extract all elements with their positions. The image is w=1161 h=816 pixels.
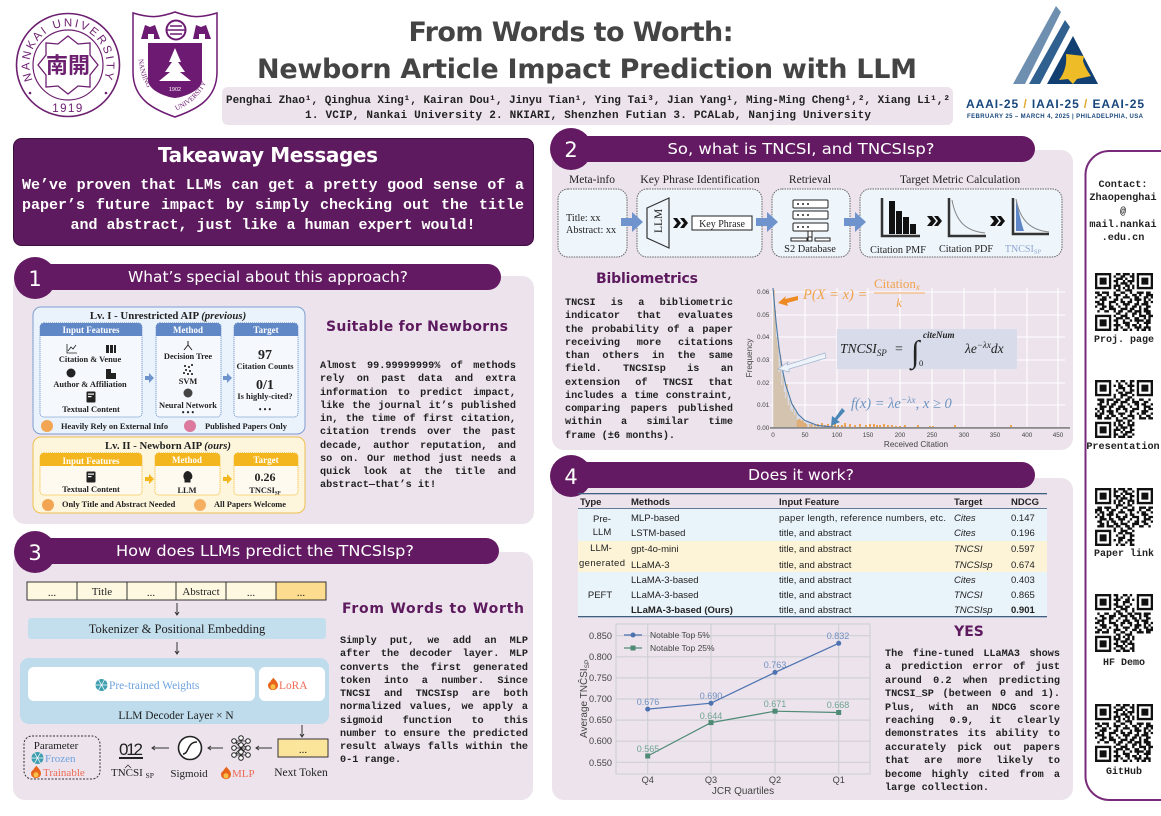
text: suitable for newborns body xyxy=(320,360,516,494)
chart: average TNCSI by JCR quartile: Notable Top 5% xyxy=(650,630,710,640)
diagram: Lv. I unrestricted AIP: Method xyxy=(173,325,203,335)
diagram: Lv. I unrestricted AIP: 97 xyxy=(258,348,272,363)
diagram: Lv. I unrestricted AIP: Decision Tree xyxy=(164,352,212,361)
text: takeaway body: and abstract, just like a human expert would! xyxy=(70,217,476,234)
block: predicted TNCSI output xyxy=(111,740,154,780)
authors and affiliations: Penghai Zhao¹, Qinghua Xing¹, Kairan Dou¹, Jinyu Tian¹, Ying Tai³, Jian Yang¹, Ming-Ming Cheng¹,², Xiang Li¹,² xyxy=(226,95,950,107)
logo: Nankai University: 1919 xyxy=(52,103,84,115)
chart: citation frequency distribution: 300 xyxy=(959,432,970,439)
chart: citation frequency distribution: 100 xyxy=(832,432,843,439)
chart: citation frequency distribution: k xyxy=(896,295,902,310)
chart: citation frequency distribution xyxy=(745,276,1070,449)
chart: citation frequency distribution: 150 xyxy=(863,432,874,439)
table: NDCG results: 0.901 xyxy=(1011,605,1035,616)
table: NDCG results: 0.597 xyxy=(1011,544,1035,555)
table: NDCG results: gpt-4o-mini xyxy=(631,544,679,555)
panel 3: how LLMs predict xyxy=(13,531,533,800)
text: suitable for newborns body: abstract—that’s it! xyxy=(320,480,436,491)
header bar 1: 1 xyxy=(28,267,42,291)
diagram: Lv. I unrestricted AIP: Target xyxy=(253,325,279,335)
table: NDCG results: title, and abstract xyxy=(779,544,852,555)
diagram: TNCSI pipeline: Abstract: xx xyxy=(566,225,616,236)
diagram: TNCSI pipeline: Citation PMF xyxy=(870,245,926,256)
title: From Words to Worth: xyxy=(408,17,734,48)
chart: average TNCSI by JCR quartile: Q3 xyxy=(705,775,717,785)
table: NDCG results: Methods xyxy=(631,497,670,508)
table: NDCG results: generated xyxy=(579,558,625,569)
chart: citation frequency distribution: 250 xyxy=(927,432,938,439)
text: results body: The fine-tuned LLaMA3 shows xyxy=(885,649,1060,660)
block: LLM decoder layer: LoRA xyxy=(279,680,308,692)
table: NDCG results: 0.147 xyxy=(1011,513,1035,524)
text: from words to worth body: Simply put, we add an MLP xyxy=(340,636,528,647)
block: sigmoid: Sigmoid xyxy=(170,768,208,780)
diagram: TNCSI pipeline: S2 Database xyxy=(784,244,836,255)
table: NDCG results: LLaMA-3-based (Ours) xyxy=(631,605,733,616)
table: NDCG results: TNCSIsp xyxy=(954,560,993,571)
logo: Nankai University: NANKAI UNIVERSITY xyxy=(22,18,114,82)
block: tokenizer: Tokenizer & Positional Embedding xyxy=(89,622,266,636)
diagram: Lv. II newborn AIP: 0.26 xyxy=(254,470,276,484)
block: MLP: MLP xyxy=(232,768,255,780)
chart: average TNCSI by JCR quartile: 0.650 xyxy=(589,715,612,725)
header bar 4: Does it work? xyxy=(748,466,854,484)
chart: average TNCSI by JCR quartile: Q4 xyxy=(642,775,654,785)
QR code: HF demo: HF Demo xyxy=(1103,658,1145,669)
text: results body: that are more likely to xyxy=(885,756,1060,767)
chart: citation frequency distribution: 50 xyxy=(801,432,809,439)
diagram: Lv. II newborn AIP: Target xyxy=(253,455,279,465)
diagram: TNCSI pipeline: SP xyxy=(1034,248,1041,256)
chart: citation frequency distribution: 350 xyxy=(990,432,1001,439)
diagram: Lv. II newborn AIP: Only Title and Abstract Needed xyxy=(62,500,176,509)
text: bibliometrics body: receiving more citations xyxy=(565,338,733,349)
arrow: tokenizer to decoder xyxy=(175,642,179,654)
table: NDCG results: 0.865 xyxy=(1011,590,1035,601)
header bar 3: 3 xyxy=(28,541,42,565)
chart: citation frequency distribution: 0 xyxy=(919,358,923,368)
arrow: decoder to next token xyxy=(300,725,304,737)
chart: citation frequency distribution: 0 xyxy=(771,432,775,439)
text: results body: around 0.2 when predicting xyxy=(885,676,1060,687)
legend: parameter: Parameter xyxy=(34,740,79,752)
diagram: Lv. II newborn AIP: TNCSI xyxy=(249,486,275,495)
QR code: paper link xyxy=(1094,488,1154,560)
arrow: next token to MLP xyxy=(256,746,272,750)
chart: average TNCSI by JCR quartile: 0.832 xyxy=(827,631,849,641)
text: suitable for newborns body: so on. Our method just needs a xyxy=(320,454,516,465)
chart: citation frequency distribution: x xyxy=(915,282,920,292)
block: next token xyxy=(274,739,328,779)
diagram: Lv. I unrestricted AIP: SVM xyxy=(179,377,197,386)
text: from words to worth body: token into a number. Since xyxy=(340,676,528,687)
chart: average TNCSI by JCR quartile: 0.644 xyxy=(700,711,722,721)
text: bibliometrics body: indicator that evaluates xyxy=(565,311,733,322)
diagram: Lv. II newborn AIP: Textual Content xyxy=(62,485,120,494)
header bar 3 xyxy=(14,531,499,573)
logo: AAAI-25 conference: FEBRUARY 25 – MARCH 4, 2025 | PHILADELPHIA, USA xyxy=(967,114,1144,120)
legend: parameter: Trainable xyxy=(43,767,85,779)
table: NDCG results: LLM xyxy=(593,527,611,538)
chart: citation frequency distribution: , x ≥ 0 xyxy=(916,396,953,412)
table: NDCG results: Input Feature xyxy=(779,497,839,508)
chart: citation frequency distribution: −λx xyxy=(977,340,991,350)
text: contact: Zhaopenghai xyxy=(1089,192,1157,204)
chart: citation frequency distribution: 0.05 xyxy=(757,312,770,319)
diagram: Lv. II newborn AIP: Input Features xyxy=(62,456,120,466)
logo: Nankai University: 南開 xyxy=(46,48,90,80)
diagram: Lv. II newborn AIP: LLM xyxy=(177,486,197,495)
table: NDCG results: TNCSI xyxy=(954,590,983,601)
table: NDCG results: LLaMA-3-based xyxy=(631,575,699,586)
table: NDCG results: title, and abstract xyxy=(779,575,852,586)
chart: citation frequency distribution: f(x) = λe xyxy=(851,396,901,412)
text: results body: become highly cited from a xyxy=(885,770,1060,781)
authors and affiliations: 1. VCIP, Nankai University 2. NKIARI, Shenzhen Futian 3. PCALab, Nanjing University xyxy=(305,110,871,122)
text: bibliometrics body xyxy=(565,297,733,445)
chart: citation frequency distribution: 0.04 xyxy=(757,334,770,341)
text: bibliometrics body: the probability of a paper xyxy=(565,324,733,336)
chart: average TNCSI by JCR quartile: Q1 xyxy=(833,775,845,785)
panel: contact and links sidebar xyxy=(1086,151,1161,800)
text: from words to worth body: sigmoid function to this xyxy=(340,716,528,726)
text: contact xyxy=(1089,180,1157,244)
text: from words to worth body: number to ensure the predicted xyxy=(340,729,528,740)
text: contact: .edu.cn xyxy=(1102,232,1144,244)
diagram: Lv. I unrestricted AIP: • • • xyxy=(259,405,271,414)
chart: average TNCSI by JCR quartile: 0.800 xyxy=(589,652,612,662)
chart: citation frequency distribution: Citation xyxy=(874,276,916,291)
QR code: presentation xyxy=(1086,380,1160,453)
diagram: input token row: Abstract xyxy=(182,586,220,598)
text: bibliometrics body: includes a time constraint, xyxy=(565,391,733,402)
text: from words to worth body xyxy=(340,635,528,769)
table: NDCG results: MLP-based xyxy=(631,513,680,524)
diagram: Lv. I unrestricted AIP: 0/1 xyxy=(256,378,274,393)
chart: citation frequency distribution: −λx xyxy=(901,396,916,406)
diagram: TNCSI pipeline xyxy=(558,173,1062,257)
chart: citation frequency distribution: Received Citation xyxy=(884,440,949,449)
header bar 4: 4 xyxy=(564,465,578,489)
chart: citation frequency distribution: λe xyxy=(965,341,977,356)
block: LLM decoder layer: Pre-trained Weights xyxy=(109,680,200,692)
diagram: Lv. I unrestricted AIP: Author & Affiliation xyxy=(53,380,127,389)
chart: citation frequency distribution: 0.01 xyxy=(757,402,770,409)
text: contact: mail.nankai xyxy=(1089,219,1157,231)
arrow: sigmoid to output xyxy=(152,746,169,750)
text: results body: Plus, with an NDCG score xyxy=(885,703,1060,714)
table: NDCG results: PEFT xyxy=(588,590,612,601)
text: suitable for newborns body: like the journal it’s published xyxy=(320,401,516,412)
diagram: TNCSI pipeline: LLM xyxy=(653,209,665,233)
chart: citation frequency distribution: 0.06 xyxy=(757,289,770,296)
table: NDCG results: Target xyxy=(954,497,983,508)
diagram: Lv. I unrestricted AIP: Neural Network xyxy=(159,401,217,410)
diagram: Lv. I unrestricted AIP: Citation Counts xyxy=(236,362,294,371)
block: next token: ... xyxy=(299,744,307,756)
text: results body: large collection. xyxy=(885,783,989,794)
chart: citation frequency distribution: 450 xyxy=(1053,432,1064,439)
QR code: GitHub: GitHub xyxy=(1106,766,1142,778)
diagram: Lv. II newborn AIP xyxy=(33,437,305,513)
text: bibliometrics body: frame (±6 months). xyxy=(565,430,675,442)
text: from words to worth body: normalized values, we apply a xyxy=(340,702,528,713)
chart: average TNCSI by JCR quartile: 0.668 xyxy=(827,700,849,710)
heading: takeaway messages: Takeaway Messages xyxy=(158,143,378,167)
text: suitable for newborns body: decade, author reputation, and xyxy=(320,440,516,452)
QR code: project page xyxy=(1094,273,1154,346)
block: MLP xyxy=(221,736,255,780)
block: LLM decoder layer: LLM Decoder Layer × N xyxy=(118,710,234,722)
text: takeaway body xyxy=(22,176,524,238)
text: suitable for newborns body: in, the time of first citation, xyxy=(320,414,516,425)
text: bibliometrics body: TNCSI is a bibliometric xyxy=(565,298,733,309)
text: takeaway body: paper’s future impact by simply checking out the title xyxy=(22,197,524,214)
chart: average TNCSI by JCR quartile: Q2 xyxy=(769,775,781,785)
chart: citation frequency distribution: ∫ xyxy=(909,334,922,371)
chart: citation frequency distribution: 0.00 xyxy=(757,425,770,432)
table: NDCG results: 0.674 xyxy=(1011,560,1035,571)
block: predicted TNCSI output: SP xyxy=(146,771,154,780)
header bar 4 xyxy=(550,455,1035,497)
logo: Nanjing University: UNIVERSITY xyxy=(174,80,206,110)
text: suitable for newborns body: rely on past data and extra xyxy=(320,374,516,385)
table: NDCG results: paper length, reference numbers, etc. xyxy=(779,513,946,524)
block: predicted TNCSI output: TNCSI xyxy=(111,767,143,779)
chart: citation frequency distribution: dx xyxy=(991,341,1004,356)
text: results body: TNCSI_SP (between 0 and 1). xyxy=(885,689,1060,700)
chart: average TNCSI by JCR quartile: 0.850 xyxy=(589,631,612,641)
panel 4: does it work xyxy=(550,455,1073,800)
table: NDCG results: LSTM-based xyxy=(631,528,685,539)
text: from words to worth body: converts the first generated xyxy=(340,662,528,674)
table: NDCG results: title, and abstract xyxy=(779,605,852,616)
diagram: TNCSI pipeline: Retrieval xyxy=(789,174,831,186)
text: contact: Contact: xyxy=(1099,180,1147,191)
diagram: TNCSI pipeline: Key Phrase xyxy=(699,219,745,230)
text: takeaway body: We’ve proven that LLMs can get a pretty good sense of a xyxy=(22,177,524,194)
text: results body: accurately pick out papers xyxy=(885,743,1060,754)
table: NDCG results: LLaMA-3 xyxy=(631,560,670,571)
diagram: Lv. I unrestricted AIP: Lv. I - Unrestricted AIP (previous) xyxy=(90,310,246,322)
heading: from words to worth: From Words to Worth xyxy=(342,601,524,617)
table: NDCG results: 0.196 xyxy=(1011,528,1035,539)
diagram: Lv. II newborn AIP: All Papers Welcome xyxy=(214,500,286,509)
QR code: HF demo xyxy=(1095,594,1153,669)
diagram: input token row xyxy=(27,582,326,600)
chart: average TNCSI by JCR quartile: 0.690 xyxy=(700,691,722,701)
chart: average TNCSI by JCR quartile: SP xyxy=(584,660,591,668)
chart: average TNCSI by JCR quartile: 0.671 xyxy=(764,699,786,709)
block: next token: Next Token xyxy=(274,767,328,779)
diagram: input token row: ... xyxy=(147,587,155,599)
header bar 2 xyxy=(550,128,1035,170)
chart: citation frequency distribution: TNCSI xyxy=(840,341,877,356)
text: results body: demonstrates its ability to xyxy=(885,729,1060,740)
diagram: Lv. I unrestricted AIP: Input Features xyxy=(62,325,120,335)
text: results body xyxy=(885,648,1060,796)
block: sigmoid xyxy=(170,736,208,780)
title xyxy=(257,17,917,85)
text: from words to worth body: after the decoder layer. MLP xyxy=(340,649,528,660)
table: NDCG results: LLaMA-3-based xyxy=(631,590,699,601)
diagram: Lv. II newborn AIP: SP xyxy=(275,492,281,496)
diagram: Lv. I unrestricted AIP: Textual Content xyxy=(62,405,120,414)
header bar 1 xyxy=(14,257,501,299)
diagram: input token row: ... xyxy=(297,587,305,599)
legend: parameter: Frozen xyxy=(45,753,76,765)
chart: average TNCSI by JCR quartile xyxy=(577,624,870,797)
text: suitable for newborns body: Almost 99.99999999% of methods xyxy=(320,361,516,372)
authors and affiliations xyxy=(222,87,953,125)
table: NDCG results: 0.403 xyxy=(1011,575,1035,586)
diagram: TNCSI pipeline: Target Metric Calculation xyxy=(900,173,1020,186)
diagram: Lv. I unrestricted AIP: Citation & Venue xyxy=(59,355,121,364)
diagram: Lv. I unrestricted AIP xyxy=(33,307,305,434)
table: NDCG results: TNCSI xyxy=(954,544,983,555)
QR code: paper link: Paper link xyxy=(1094,548,1154,560)
table: NDCG results: LLM- xyxy=(590,543,612,554)
chart: citation frequency distribution: citeNum xyxy=(923,330,954,340)
block: predicted TNCSI output: 012 xyxy=(119,740,143,759)
chart: citation frequency distribution: 0.03 xyxy=(757,357,770,364)
legend: parameter xyxy=(24,736,100,779)
chart: citation frequency distribution: 400 xyxy=(1022,432,1033,439)
chart: citation frequency distribution: Frequency xyxy=(745,338,754,377)
text: bibliometrics body: field. TNCSIsp is an xyxy=(565,364,733,375)
diagram: input token row: ... xyxy=(247,587,255,599)
QR code: GitHub xyxy=(1095,704,1153,778)
chart: average TNCSI by JCR quartile: 0.750 xyxy=(589,673,612,683)
chart: average TNCSI by JCR quartile: 0.600 xyxy=(589,736,612,746)
heading: YES: YES xyxy=(953,624,984,640)
text: suitable for newborns body: information to predict impact, xyxy=(320,388,516,398)
logo: AAAI-25 conference xyxy=(966,6,1144,120)
panel: takeaway messages xyxy=(14,138,534,246)
QR code: presentation: Presentation xyxy=(1086,441,1160,453)
diagram: Lv. I unrestricted AIP: Is highly-cited? xyxy=(237,392,293,401)
chart: citation frequency distribution: 0.02 xyxy=(757,380,770,387)
text: bibliometrics body: within a similar time xyxy=(565,417,733,428)
chart: average TNCSI by JCR quartile: 0.565 xyxy=(637,744,659,754)
chart: average TNCSI by JCR quartile: 0.763 xyxy=(764,660,786,670)
diagram: Lv. I unrestricted AIP: • • • xyxy=(182,408,194,417)
chart: average TNCSI by JCR quartile: Notable Top 25% xyxy=(650,643,715,653)
diagram: input token row: ... xyxy=(48,587,56,599)
diagram: TNCSI pipeline: Title: xx xyxy=(566,213,600,224)
table: NDCG results: Cites xyxy=(954,513,976,524)
table: NDCG results: Cites xyxy=(954,575,976,586)
table: NDCG results xyxy=(578,493,1047,617)
diagram: Lv. II newborn AIP: Lv. II - Newborn AIP (ours) xyxy=(105,440,231,452)
logo: Nanjing University: 1902 xyxy=(169,87,181,93)
table: NDCG results: title, and abstract xyxy=(779,528,852,539)
block: LLM decoder layer xyxy=(20,658,329,724)
text: results body: reaching 0.9, it clearly xyxy=(885,716,1060,727)
header bar 2: So, what is TNCSI, and TNCSIsp? xyxy=(668,140,934,158)
QR code: project page: Proj. page xyxy=(1094,334,1154,346)
table: NDCG results: title, and abstract xyxy=(779,590,852,601)
chart: average TNCSI by JCR quartile: 0.550 xyxy=(589,758,612,768)
text: suitable for newborns body: citation trends over the past xyxy=(320,427,516,438)
diagram: Lv. II newborn AIP: Method xyxy=(172,455,202,465)
table: NDCG results: Cites xyxy=(954,528,976,539)
table: NDCG results: NDCG xyxy=(1011,497,1039,508)
heading: suitable for newborns: Suitable for Newborns xyxy=(326,319,508,335)
text: bibliometrics body: extension of TNCSI that xyxy=(565,378,733,388)
chart: citation frequency distribution: P(X = x) = xyxy=(802,287,867,303)
table: NDCG results: title, and abstract xyxy=(779,560,852,571)
diagram: TNCSI pipeline: Citation PDF xyxy=(939,244,993,255)
logo: AAAI-25 conference: AAAI-25 / IAAI-25 / EAAI-25 xyxy=(966,97,1144,111)
title: Newborn Article Impact Prediction with LLM xyxy=(257,54,917,85)
arrow: MLP to sigmoid xyxy=(208,746,223,750)
table: NDCG results: Type xyxy=(580,497,601,508)
panel 2: what is TNCSI xyxy=(550,128,1073,450)
chart: average TNCSI by JCR quartile: JCR Quartiles xyxy=(712,786,774,797)
text: from words to worth body: result always falls within the xyxy=(340,742,528,753)
chart: citation frequency distribution: 200 xyxy=(895,432,906,439)
logo: Nankai University xyxy=(16,12,120,118)
text: suitable for newborns body: quick look at the title and xyxy=(320,467,516,478)
chart: citation frequency distribution: = xyxy=(895,342,903,357)
chart: average TNCSI by JCR quartile: 0.676 xyxy=(637,697,659,707)
chart: average TNCSI by JCR quartile: 0.700 xyxy=(589,694,612,704)
panel 1: what's special xyxy=(13,257,534,524)
diagram: input token row: Title xyxy=(92,586,112,598)
text: bibliometrics body: comparing papers published xyxy=(565,404,733,415)
diagram: Lv. I unrestricted AIP: Heavily Rely on External Info xyxy=(61,422,168,431)
header bar 2: 2 xyxy=(564,138,578,162)
text: from words to worth body: TNCSI and TNCSIsp are both xyxy=(340,689,528,700)
text: bibliometrics body: than others in the same xyxy=(565,351,733,362)
chart: average TNCSI by JCR quartile: Average TNĈSI xyxy=(579,668,590,738)
heading: bibliometrics: Bibliometrics xyxy=(596,271,698,287)
diagram: Lv. I unrestricted AIP: Published Papers Only xyxy=(205,422,288,431)
text: results body: a prediction error of just xyxy=(885,662,1060,673)
header bar 1: What’s special about this approach? xyxy=(128,268,408,286)
arrow: tokens to tokenizer xyxy=(175,603,179,615)
text: contact: @ xyxy=(1120,206,1126,218)
chart: citation frequency distribution: SP xyxy=(877,348,887,358)
text: from words to worth body: 0-1 range. xyxy=(340,755,401,766)
logo: Nanjing University xyxy=(132,11,218,118)
diagram: TNCSI pipeline: TNCSI xyxy=(1005,244,1034,255)
diagram: TNCSI pipeline: Key Phrase Identification xyxy=(640,173,760,186)
diagram: TNCSI pipeline: Meta-info xyxy=(569,174,615,186)
block: tokenizer xyxy=(28,618,326,639)
header bar 3: How does LLMs predict the TNCSIsp? xyxy=(116,542,414,560)
table: NDCG results: Pre- xyxy=(593,514,611,525)
logo: Nanjing University: NANJING xyxy=(138,58,150,88)
table: NDCG results: TNCSIsp xyxy=(954,605,993,616)
